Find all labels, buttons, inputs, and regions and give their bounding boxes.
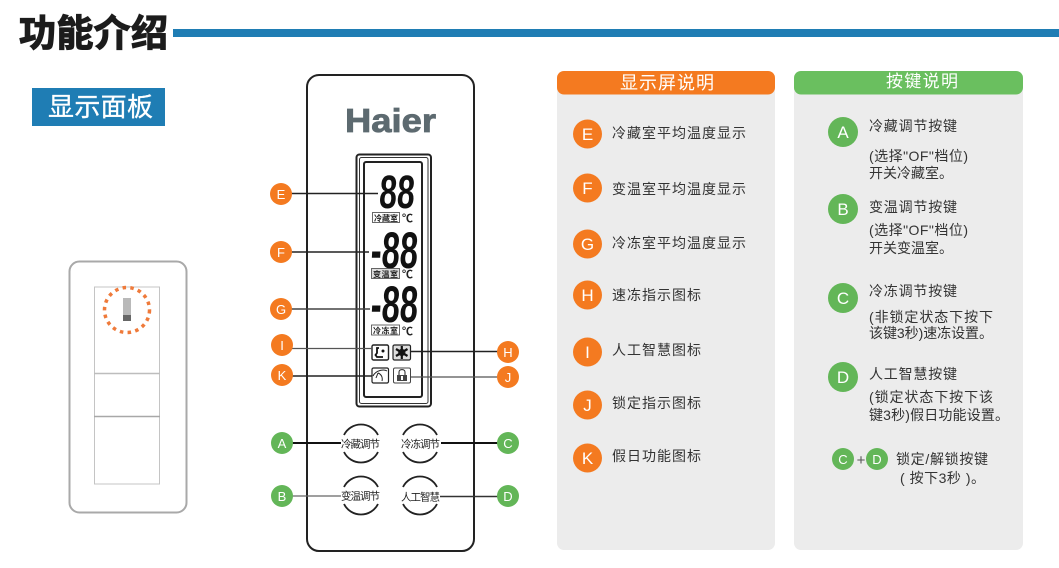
callout B: B: [278, 489, 286, 504]
item B: (选择"OF"档位): [869, 222, 968, 238]
callout H: [410, 341, 519, 363]
button: refrigerator adjust: [341, 424, 380, 463]
item K: 假日功能图标: [612, 448, 701, 464]
refrigerator temperature readout: ℃: [402, 213, 413, 225]
item H: 速冻指示图标: [612, 287, 701, 303]
item D: 人工智慧按键: [869, 366, 957, 382]
item A: 开关冷藏室。: [869, 165, 953, 181]
button: freezer adjust: [401, 424, 440, 463]
item E: 冷藏室平均温度显示: [612, 125, 746, 141]
icon: holiday function: [372, 368, 388, 383]
item B: B: [837, 200, 849, 219]
title bar: [173, 29, 1059, 37]
callout C: C: [503, 436, 513, 451]
item C: [828, 283, 993, 341]
callout G: G: [276, 302, 286, 317]
orange header: [557, 71, 775, 94]
item C plus D: D: [872, 452, 882, 467]
orange header: 显示屏说明: [620, 73, 714, 93]
item D: D: [837, 368, 849, 387]
variable room temperature readout: 变温室: [373, 269, 398, 279]
refrigerator temperature readout: 88: [378, 167, 416, 219]
green header: [794, 71, 1023, 94]
item C plus D: [832, 448, 988, 486]
item G: G: [581, 235, 594, 254]
callout H: H: [503, 345, 513, 360]
item C: 冷冻调节按键: [869, 283, 957, 299]
callout K: K: [278, 368, 287, 383]
icon: lock: [394, 368, 410, 383]
callout G: [270, 298, 370, 320]
freezer temperature readout: 冷冻室: [373, 326, 398, 336]
button: freezer adjust: 冷冻调节: [401, 438, 440, 450]
callout A: A: [278, 436, 287, 451]
callout E: [270, 183, 378, 205]
item C plus D: 锁定/解锁按键: [896, 451, 988, 467]
Haier logo: Haier: [345, 102, 436, 139]
refrigerator temperature readout: 冷藏室: [374, 213, 398, 223]
item J: J: [583, 396, 592, 415]
item A: A: [837, 123, 849, 142]
item G: [573, 230, 746, 258]
button: variable room adjust: [341, 476, 380, 515]
item B: 开关变温室。: [869, 240, 953, 256]
dotted highlight circle: [104, 288, 150, 332]
callout F: [270, 241, 369, 263]
item H: [573, 280, 701, 310]
item D: [828, 362, 1009, 423]
heading: display panel: 显示面板: [48, 92, 153, 122]
item F: [573, 174, 746, 202]
callout D: D: [503, 489, 513, 504]
callout I: [271, 334, 372, 356]
callout J: [411, 366, 519, 388]
item H: H: [581, 286, 594, 305]
callout I: I: [280, 338, 284, 353]
variable room temperature readout: -88: [369, 223, 420, 280]
item K: K: [582, 449, 594, 468]
item J: [573, 390, 701, 420]
callout B: [271, 485, 341, 507]
fridge overview: [70, 262, 186, 512]
callout J: J: [505, 370, 511, 385]
item A: [828, 117, 968, 181]
control panel: [307, 75, 474, 551]
callout A: [271, 432, 341, 454]
item E: E: [582, 125, 593, 144]
variable room temperature readout: ℃: [402, 269, 413, 281]
item B: 变温调节按键: [869, 199, 957, 215]
item C plus D: C: [838, 452, 848, 467]
callout E: E: [277, 187, 286, 202]
callout K: [271, 364, 372, 386]
item K: [573, 444, 701, 472]
item C: C: [837, 289, 849, 308]
item D: 键3秒)假日功能设置。: [869, 407, 1009, 423]
button: artificial intelligence: [401, 476, 440, 515]
freezer temperature readout: -88: [369, 277, 420, 334]
button: refrigerator adjust: 冷藏调节: [341, 438, 380, 450]
button: artificial intelligence: 人工智慧: [401, 490, 440, 504]
item C: 该键3秒)速冻设置。: [869, 325, 993, 341]
item J: 锁定指示图标: [612, 395, 701, 411]
item A: 冷藏调节按键: [869, 118, 957, 134]
item B: [828, 194, 968, 256]
item E: [573, 120, 746, 148]
item C: (非锁定状态下按下: [869, 309, 993, 325]
panel: button explanation: [794, 71, 1023, 550]
button: variable room adjust: 变温调节: [341, 490, 380, 502]
item D: (锁定状态下按下该: [869, 389, 993, 405]
callout C: [441, 432, 519, 454]
icon: quick freeze snowflake: [393, 345, 410, 360]
green header: 按键说明: [886, 72, 958, 91]
item G: 冷冻室平均温度显示: [612, 235, 746, 251]
item C plus D: +: [857, 452, 866, 469]
callout F: F: [277, 245, 285, 260]
heading: display panel: [32, 88, 165, 126]
item A: (选择"OF"档位): [869, 148, 968, 164]
panel: display explanation: [557, 71, 775, 550]
item I: [573, 338, 701, 366]
icon: artificial intelligence: [372, 345, 388, 360]
item I: I: [585, 343, 590, 362]
item I: 人工智慧图标: [612, 342, 701, 358]
item F: F: [582, 179, 593, 198]
freezer temperature readout: ℃: [402, 326, 413, 338]
LCD screen: [356, 154, 431, 406]
item F: 变温室平均温度显示: [612, 181, 746, 197]
callout D: [440, 485, 519, 507]
item C plus D: ( 按下3秒 )。: [900, 470, 985, 486]
title: 功能介绍: [19, 13, 168, 54]
